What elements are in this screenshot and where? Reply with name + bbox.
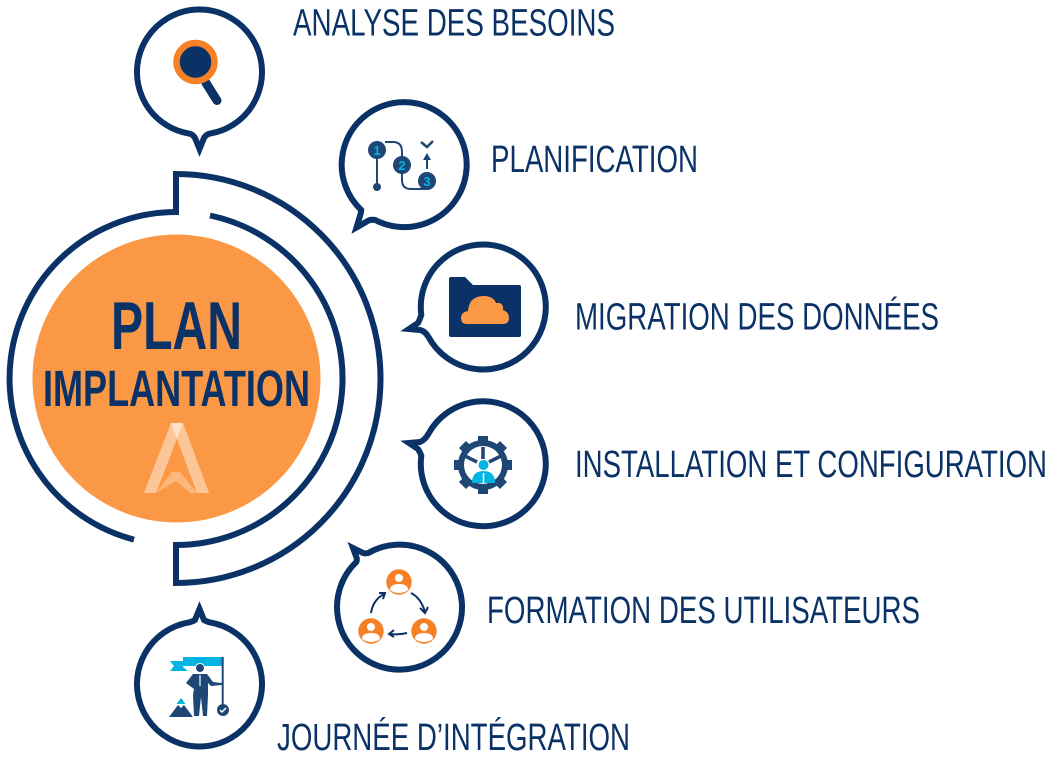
central ring [10,174,381,583]
icon: numbered path: 3 [423,174,431,189]
label: ANALYSE DES BESOINS [293,2,615,44]
icon: numbered path: 1 [373,143,381,158]
icon: company logo A [144,423,209,493]
icon: person with flag [169,657,229,717]
step 1: analyse des besoins [137,2,615,149]
step 5: formation des utilisateurs [337,545,920,670]
step 6: journée d'intégration [137,609,630,759]
speech bubble [137,10,262,149]
panel: central plan diagram [10,174,381,583]
orange central disc [32,234,320,522]
icon: gear with user [454,436,512,494]
speech bubble [409,244,546,369]
icon: numbered path [368,141,436,191]
icon: user cycle [358,569,437,644]
icon: cloud folder [449,277,521,337]
title: PLAN: PLAN [111,288,242,364]
step 3: migration des données [409,244,939,369]
speech bubble [342,102,467,228]
icon: magnifying glass [176,43,217,100]
label: PLANIFICATION [491,139,698,181]
speech bubble [337,545,462,670]
label: JOURNÉE D’INTÉGRATION [277,716,630,759]
title: IMPLANTATION: IMPLANTATION [43,360,310,417]
step 2: planification [342,102,698,228]
step 4: installation et configuration [409,401,1047,526]
icon: numbered path: 2 [398,158,406,173]
speech bubble [409,401,546,526]
speech bubble [137,609,262,746]
